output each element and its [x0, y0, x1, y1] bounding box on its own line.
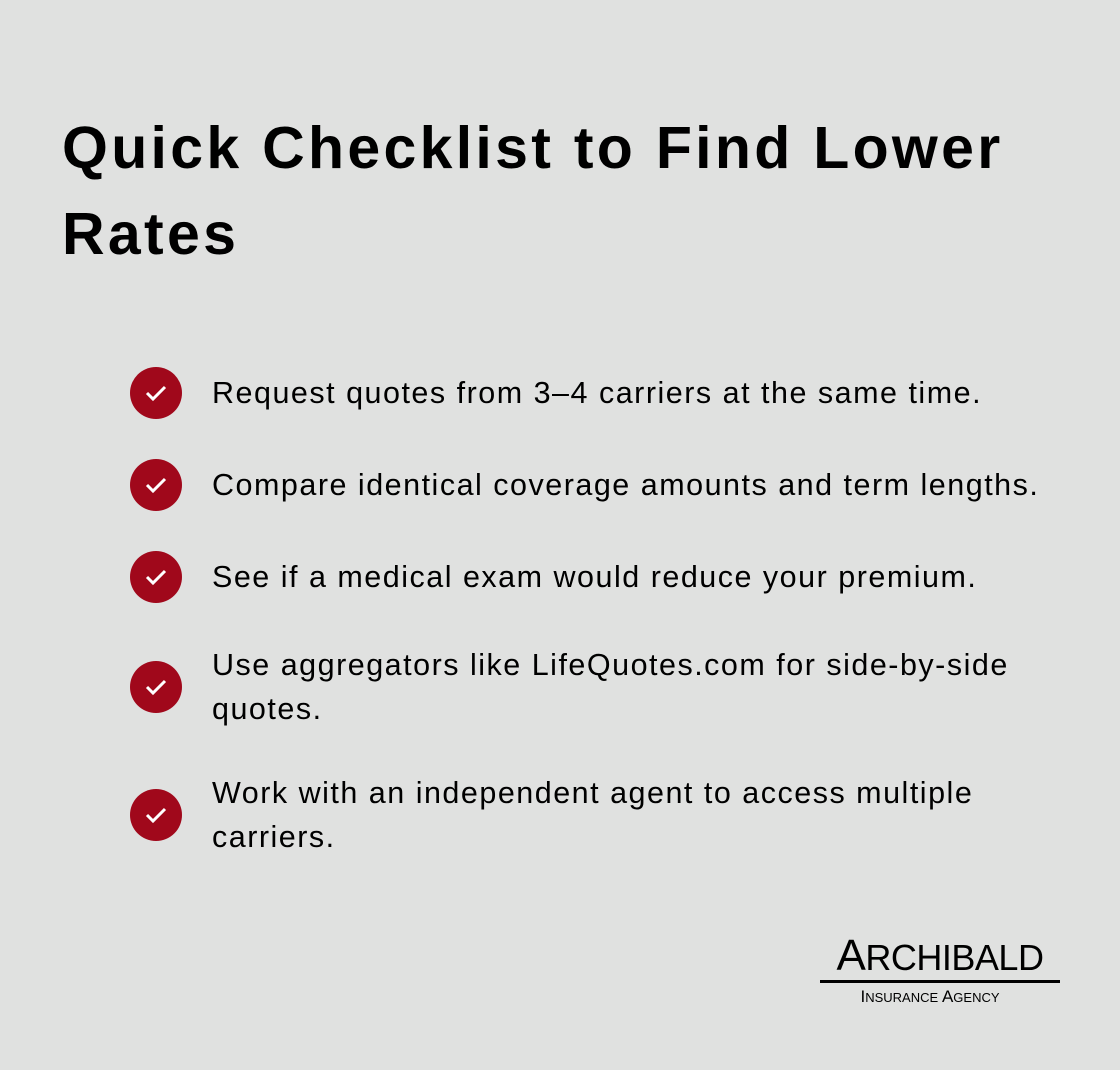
item 5 [130, 776, 973, 854]
item 2 [130, 459, 1039, 511]
icon: check [130, 367, 182, 419]
icon: check [130, 459, 182, 511]
text: Request quotes from 3–4 carriers at the same time. [212, 376, 982, 410]
logo [820, 931, 1060, 1006]
item 1 [130, 367, 982, 419]
icon: check [130, 551, 182, 603]
item 4 [130, 648, 1009, 726]
icon: check [130, 789, 182, 841]
text: See if a medical exam would reduce your premium. [212, 560, 977, 594]
item 3 [130, 551, 977, 603]
text: Use aggregators like LifeQuotes.com for side-by-side quotes. [212, 648, 1009, 726]
text: Compare identical coverage amounts and term lengths. [212, 468, 1039, 502]
title: Quick Checklist to Find Lower Rates [62, 115, 1004, 267]
logo: ARCHIBALD [837, 931, 1043, 980]
icon: check [130, 661, 182, 713]
text: Work with an independent agent to access multiple carriers. [212, 776, 973, 854]
logo: INSURANCE AGENCY [860, 987, 1000, 1006]
